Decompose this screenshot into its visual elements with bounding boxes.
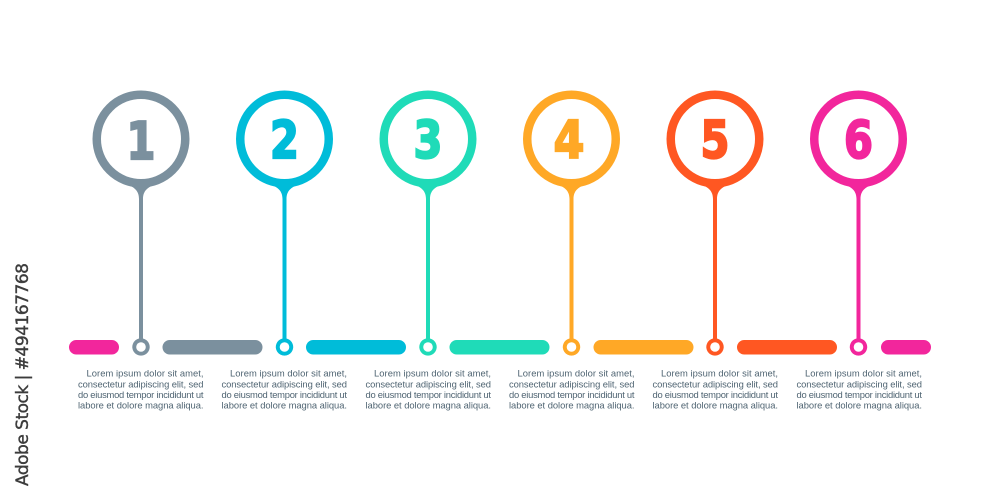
- pin 6: [814, 95, 903, 356]
- text block 4: consectetur adipiscing elit, sed: [509, 378, 634, 390]
- text block 1: labore et dolore magna aliqua.: [78, 400, 204, 410]
- vertical stock credit: Adobe Stock | #494167768: [13, 263, 33, 486]
- pin 2: [240, 95, 329, 356]
- text block 1: [78, 368, 204, 410]
- pin 5: [671, 95, 759, 356]
- text block 5: [652, 368, 778, 410]
- text block 3: Lorem ipsum dolor sit amet,: [374, 368, 491, 378]
- bar: grey: [162, 340, 262, 354]
- text block 5: consectetur adipiscing elit, sed: [652, 378, 778, 390]
- text block 6: [796, 368, 922, 410]
- text block 3: labore et dolore magna aliqua.: [366, 400, 491, 410]
- text block 4: do eiusmod tempor incididunt ut: [509, 389, 635, 400]
- text block 2: do eiusmod tempor incididunt ut: [222, 389, 347, 400]
- bar: amber: [594, 340, 694, 354]
- text block 5: do eiusmod tempor incididunt ut: [652, 389, 778, 400]
- bar: blue: [306, 340, 406, 354]
- text block 2: [222, 368, 347, 410]
- number 1: 1: [127, 112, 155, 172]
- bar: orange: [737, 340, 837, 354]
- pin 3: [384, 95, 472, 356]
- text block 1: Lorem ipsum dolor sit amet,: [86, 368, 204, 378]
- text block 3: consectetur adipiscing elit, sed: [366, 378, 491, 390]
- text block 3: [366, 368, 491, 410]
- number 3: 3: [414, 111, 442, 171]
- text block 6: do eiusmod tempor incididunt ut: [796, 389, 922, 400]
- text block 3: do eiusmod tempor incididunt ut: [366, 389, 491, 400]
- bar: pink right: [881, 340, 931, 354]
- text block 6: Lorem ipsum dolor sit amet,: [805, 368, 922, 378]
- text block 4: [509, 368, 635, 410]
- text block 1: consectetur adipiscing elit, sed: [78, 378, 204, 390]
- number 2: 2: [270, 111, 299, 171]
- text block 2: labore et dolore magna aliqua.: [222, 400, 347, 410]
- text block 1: do eiusmod tempor incididunt ut: [78, 389, 204, 400]
- text block 6: labore et dolore magna aliqua.: [796, 400, 922, 410]
- number 5: 5: [701, 111, 729, 171]
- pin 4: [527, 95, 616, 356]
- text block 4: labore et dolore magna aliqua.: [509, 400, 634, 410]
- text block 5: Lorem ipsum dolor sit amet,: [661, 368, 778, 378]
- bar: teal: [450, 340, 550, 354]
- number 6: 6: [844, 111, 873, 171]
- text block 5: labore et dolore magna aliqua.: [652, 400, 778, 410]
- pin 1: [97, 95, 185, 356]
- text block 4: Lorem ipsum dolor sit amet,: [518, 368, 634, 378]
- text block 2: Lorem ipsum dolor sit amet,: [230, 368, 347, 378]
- text block 2: consectetur adipiscing elit, sed: [222, 378, 347, 390]
- number 4: 4: [554, 111, 584, 171]
- bar: pink left: [69, 340, 119, 354]
- text block 6: consectetur adipiscing elit, sed: [796, 378, 922, 390]
